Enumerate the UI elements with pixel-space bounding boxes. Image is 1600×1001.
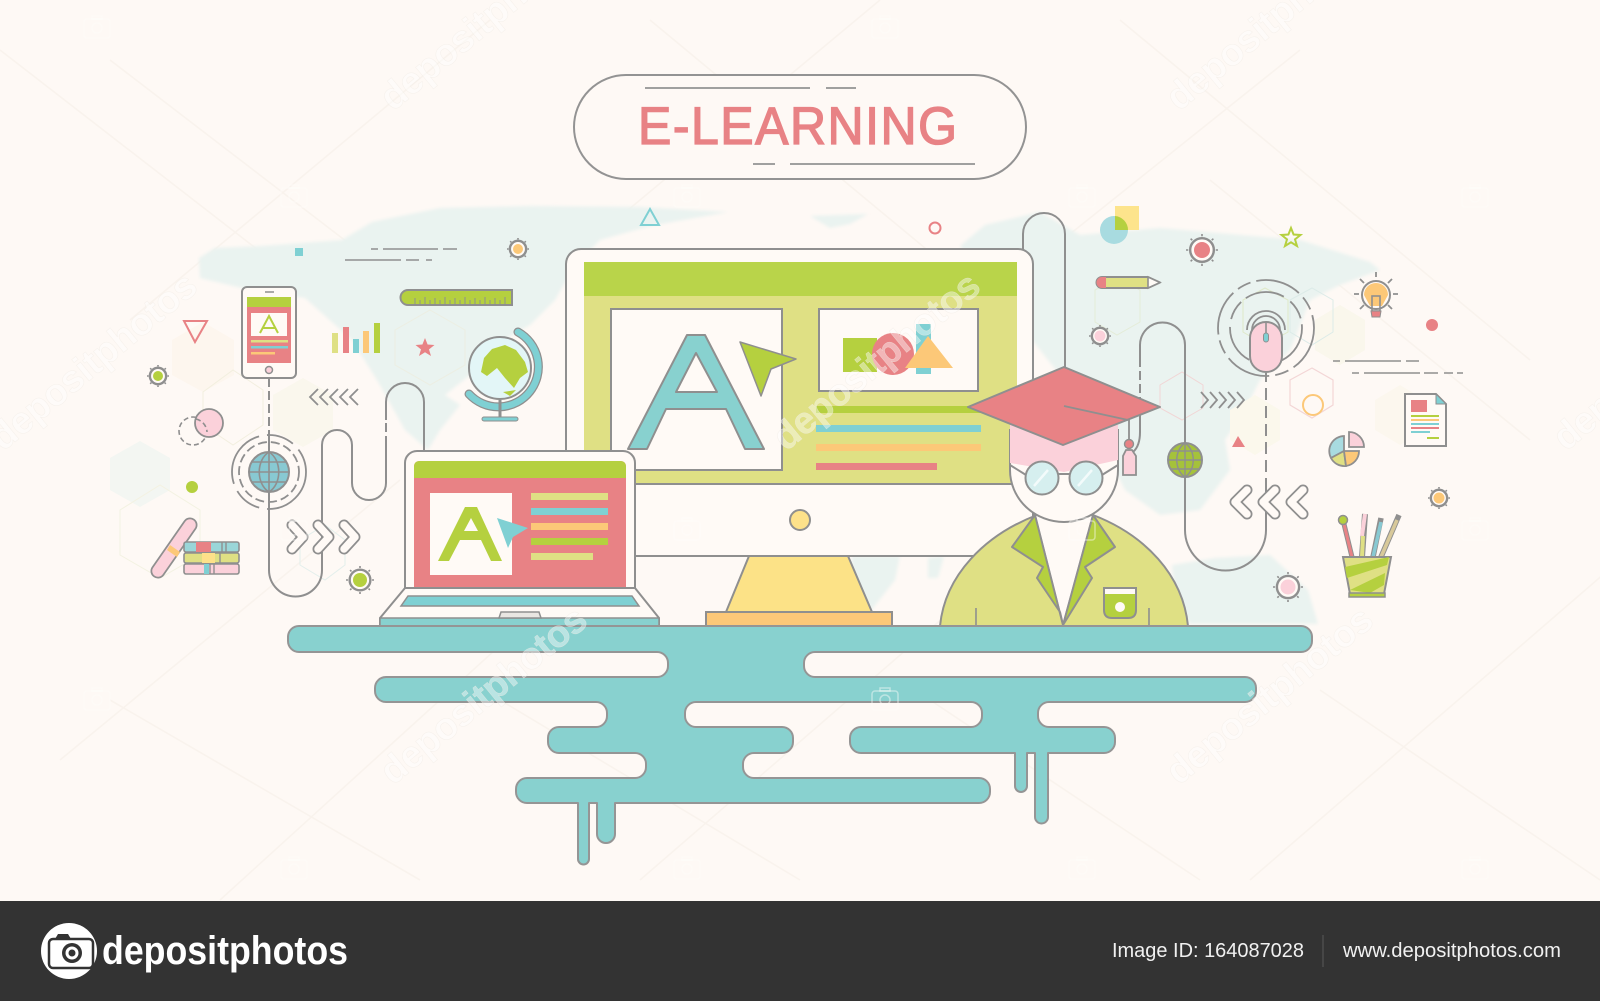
arrows: big left chevrons bbox=[1235, 490, 1303, 514]
arrows: big right chevrons bbox=[292, 525, 355, 549]
icon: teal triangle outline bbox=[641, 209, 659, 225]
laptop screen bbox=[414, 461, 626, 588]
icon: phone bbox=[242, 287, 296, 378]
cable: phone to laptop bbox=[269, 378, 424, 596]
watermarks: depositphotos bbox=[765, 264, 988, 459]
icon: orange gear bbox=[1428, 487, 1450, 509]
jacket bbox=[940, 515, 1188, 626]
icon: mouse with rings bbox=[1218, 280, 1314, 376]
watermark camera icons bbox=[84, 16, 1488, 879]
icon: small gear left bbox=[147, 365, 169, 387]
icon: overlapping circles bbox=[179, 409, 223, 445]
decorative dashes right bbox=[1333, 361, 1463, 373]
map: eurasia bbox=[960, 212, 1380, 515]
title pill bbox=[574, 75, 1026, 179]
decorative dashes left bbox=[345, 249, 457, 260]
laptop lid bbox=[405, 451, 635, 588]
icon: circle and square overlap bbox=[1100, 206, 1139, 244]
laptop letter panel bbox=[430, 493, 528, 575]
panel: letter A bbox=[611, 309, 796, 470]
left lapel bbox=[1012, 515, 1063, 625]
website: www.depositphotos.com bbox=[1342, 940, 1561, 962]
world map bbox=[199, 206, 1380, 624]
hexagon pattern bbox=[110, 278, 1425, 580]
map: north america bbox=[199, 206, 728, 450]
bar chart bbox=[332, 323, 380, 353]
map: africa bbox=[850, 556, 900, 612]
icon: document bbox=[1405, 394, 1446, 446]
tassel bbox=[1123, 419, 1136, 475]
cable: right loop to mouse bbox=[1133, 322, 1266, 570]
icon: pink gear bbox=[1089, 325, 1111, 347]
watermarks: depositphotos bbox=[1158, 598, 1381, 793]
icon: teal square bbox=[295, 248, 303, 256]
screen body bbox=[584, 296, 1017, 484]
laptop text lines bbox=[531, 493, 608, 560]
power button bbox=[790, 510, 810, 530]
title: E-LEARNING bbox=[638, 97, 959, 155]
footer bar bbox=[0, 901, 1600, 1001]
icon: pink ring bbox=[930, 222, 940, 234]
laptop base bbox=[380, 588, 659, 626]
icon: pie chart bbox=[1329, 432, 1364, 466]
pocket bbox=[1104, 588, 1136, 618]
hair band bbox=[1010, 425, 1118, 472]
icon: triangle outline pink bbox=[184, 321, 207, 342]
icon: pencil cup bbox=[1338, 514, 1399, 597]
map: madagascar bbox=[928, 556, 944, 578]
icon: gear by laptop bbox=[346, 566, 374, 594]
monitor stand bbox=[726, 556, 872, 612]
panel: shapes bbox=[819, 309, 978, 391]
icon: books bbox=[158, 525, 239, 574]
monitor body bbox=[566, 249, 1033, 556]
icon: network globe bbox=[232, 435, 306, 509]
mortarboard bbox=[968, 367, 1160, 445]
shirt bbox=[1035, 515, 1093, 625]
icon: desktop globe bbox=[469, 332, 538, 421]
glasses bbox=[1010, 462, 1118, 494]
icon: pink gear bottom bbox=[1273, 572, 1303, 602]
image id: Image ID: 164087028 bbox=[1112, 940, 1304, 962]
head bbox=[1010, 430, 1118, 522]
text lines bbox=[816, 406, 981, 470]
right lapel bbox=[1063, 515, 1115, 625]
map: iceland bbox=[810, 214, 868, 228]
icon: red star bbox=[416, 338, 434, 356]
icon: orange ring in hexagon bbox=[1290, 368, 1333, 418]
icon: red dot bbox=[1426, 319, 1438, 331]
table: dripping desk bbox=[288, 626, 1312, 864]
icon: green star bbox=[1282, 228, 1300, 246]
icon: red triangle bbox=[1232, 436, 1245, 447]
arrows: thin right chevrons bbox=[1201, 392, 1244, 408]
icon: small gear top bbox=[507, 238, 529, 260]
cable: monitor top loop bbox=[1023, 213, 1065, 370]
icon: green globe bbox=[1168, 443, 1202, 477]
screen header bbox=[584, 262, 1017, 296]
person: graduate bbox=[940, 367, 1188, 626]
laptop bbox=[380, 451, 659, 626]
footer logo icon bbox=[41, 923, 97, 979]
arrows: thin left chevrons bbox=[310, 389, 358, 405]
watermarks: depositphotos bbox=[372, 598, 595, 793]
watermarks bbox=[0, 0, 1600, 793]
icon: ruler bbox=[400, 290, 512, 305]
monitor base bbox=[706, 612, 892, 626]
icon: green dot bbox=[186, 481, 198, 493]
footer logo text: depositphotos bbox=[102, 929, 348, 973]
map: australia bbox=[1172, 555, 1318, 624]
icon: red gear top bbox=[1186, 234, 1218, 266]
icon: pencil bbox=[1096, 277, 1160, 288]
icon: light bulb bbox=[1354, 272, 1398, 317]
monitor bbox=[566, 249, 1033, 626]
